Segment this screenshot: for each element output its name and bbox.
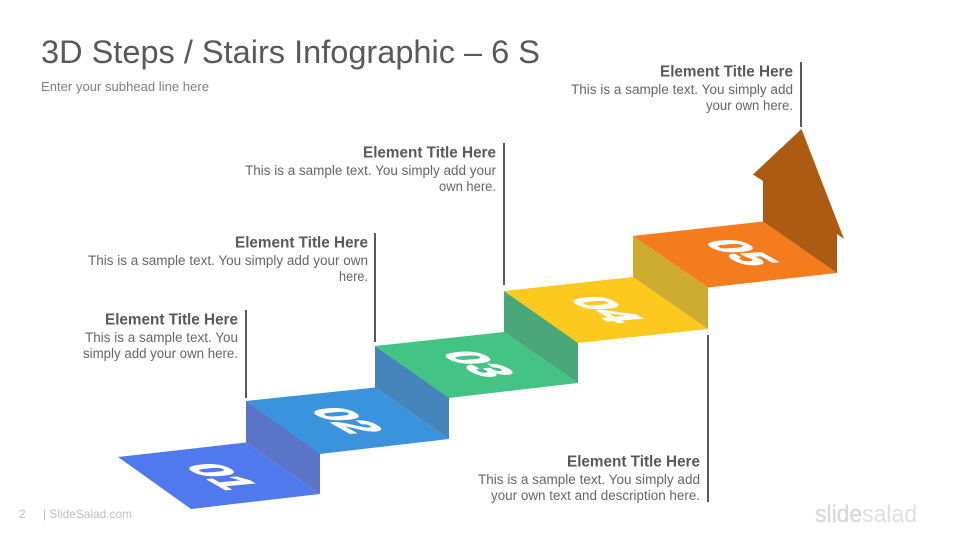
step 02: 02	[297, 406, 396, 435]
stairs graphic	[118, 129, 844, 509]
callout: step 02: This is a sample text. You simply add your own	[88, 253, 368, 268]
step 03	[375, 332, 578, 398]
callout: step 01: Element Title Here	[105, 312, 238, 328]
callout: step 03	[245, 143, 505, 285]
footer: page number and site: | SlideSalad.com	[43, 507, 132, 521]
logo: slidesalad	[815, 501, 917, 528]
riser 01 to 02	[246, 401, 320, 494]
arrow	[753, 129, 844, 273]
callout: step 04: your own text and description here.	[491, 488, 700, 503]
callout: step 05: Element Title Here	[660, 64, 793, 80]
step 01	[118, 442, 320, 509]
callout: step 02: Element Title Here	[235, 234, 368, 252]
step 04	[504, 277, 708, 343]
callout: step 01: This is a sample text. You	[85, 330, 238, 345]
callout: step 04: This is a sample text. You simply add	[478, 472, 700, 487]
callout: step 01	[83, 310, 247, 398]
step 05	[633, 222, 837, 288]
subhead: Enter your subhead line here	[41, 79, 209, 94]
step 01: 01	[172, 462, 271, 491]
callout: step 04: Element Title Here	[567, 454, 700, 470]
step 02	[246, 388, 449, 454]
callout: step 03: Element Title Here	[363, 144, 496, 162]
callout: step 02	[88, 233, 376, 342]
callout: step 02: here.	[339, 269, 368, 284]
title: 3D Steps / Stairs Infographic – 6 S	[41, 34, 540, 70]
callout: step 05: This is a sample text. You simply add	[571, 82, 793, 97]
callout: step 05	[571, 62, 802, 127]
footer: page number and site: 2	[19, 507, 26, 521]
step 04: 04	[556, 295, 656, 325]
step 03: 03	[428, 349, 527, 379]
riser 02 to 03	[375, 346, 449, 439]
riser 04 to 05	[633, 236, 708, 329]
callout: step 03: This is a sample text. You simply add your	[245, 163, 497, 178]
callout: step 01: simply add your own here.	[83, 346, 238, 361]
callout: step 05: your own here.	[706, 98, 793, 113]
riser 03 to 04	[504, 291, 578, 383]
step 05: 05	[691, 238, 790, 267]
callout: step 04	[478, 335, 709, 503]
callout: step 03: own here.	[439, 179, 496, 194]
